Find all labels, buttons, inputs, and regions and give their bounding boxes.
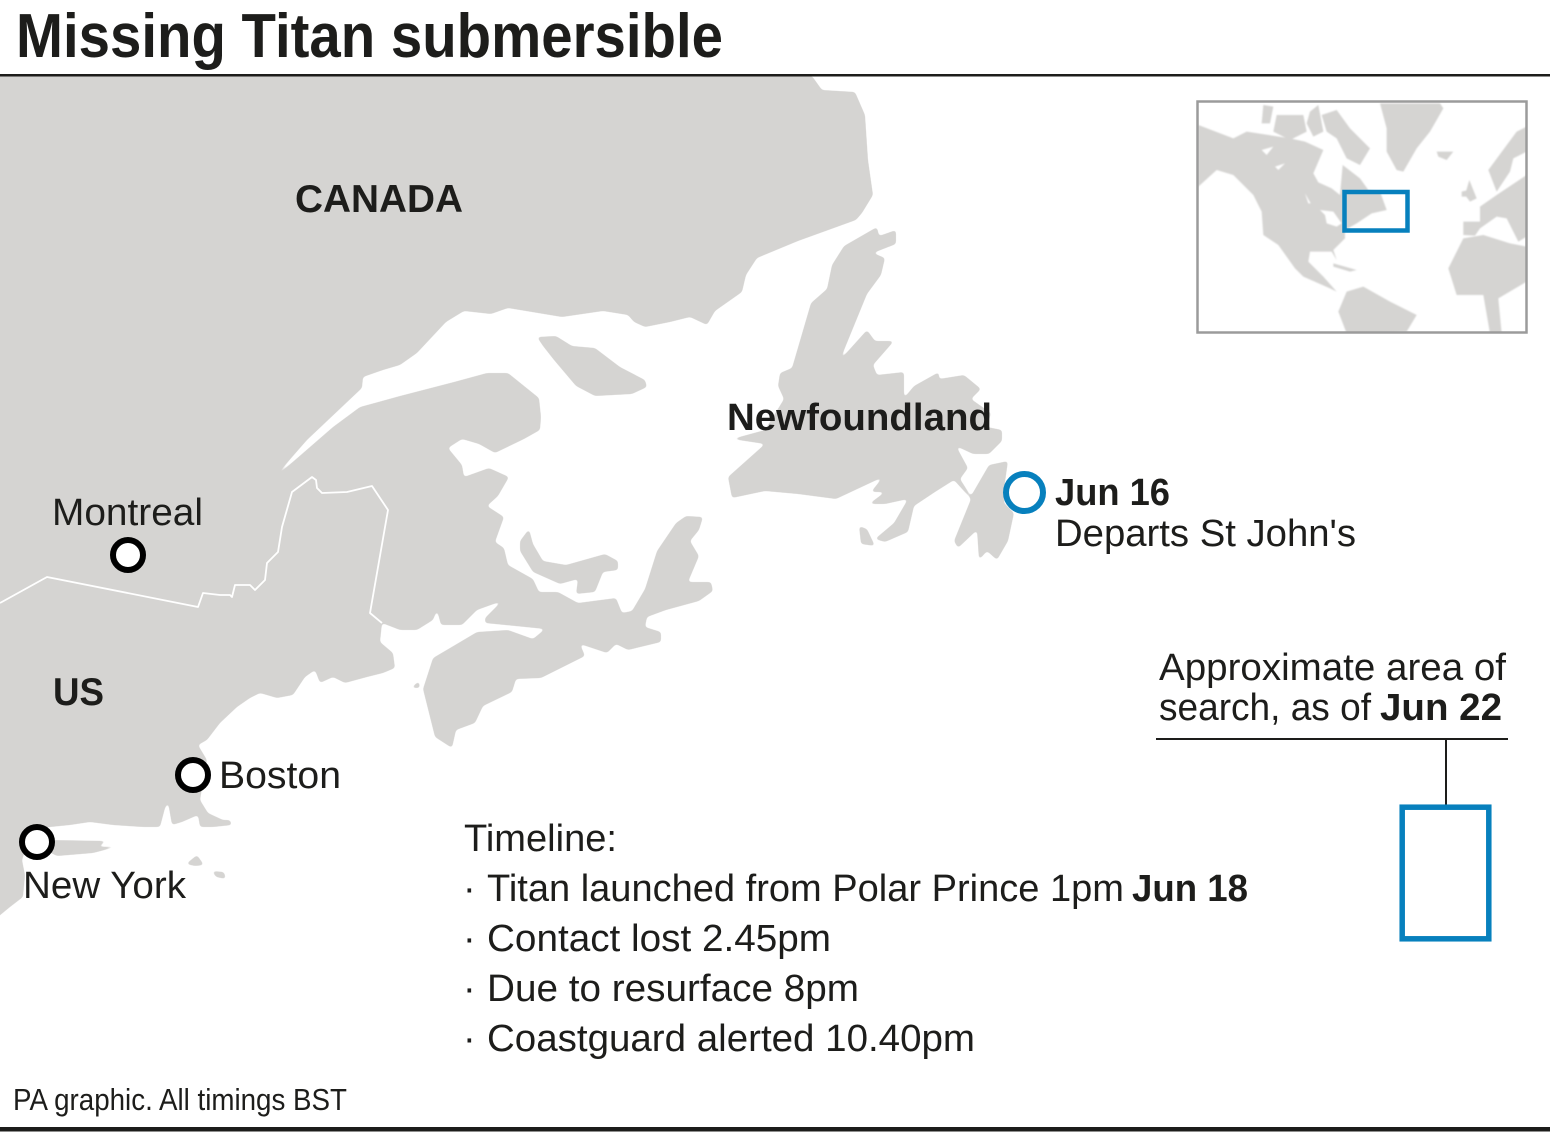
callout text — [1159, 647, 1506, 729]
timeline text block: · — [463, 968, 476, 1010]
label: CANADA: CANADA — [295, 178, 463, 221]
marker: Boston — [178, 760, 208, 790]
inset locator map — [1198, 102, 1527, 333]
label: Jun 16 departure: Jun 16 — [1055, 472, 1170, 514]
timeline text block: Contact lost 2.45pm — [487, 918, 831, 960]
timeline text block: Jun 18 — [1132, 868, 1248, 910]
label: US: US — [53, 671, 104, 714]
callout leader lines — [1156, 739, 1508, 805]
search area rectangle — [1402, 807, 1489, 939]
border: Canada and US — [0, 477, 388, 623]
label: Boston: Boston — [219, 755, 341, 797]
land masses — [0, 76, 1014, 940]
timeline text block: Titan launched from Polar Prince 1pm — [487, 868, 1124, 910]
land: small islands — [186, 526, 875, 879]
inset land masses — [1198, 103, 1527, 333]
source note: PA graphic. All timings BST — [13, 1082, 347, 1117]
timeline text block: · — [463, 918, 476, 960]
label: Jun 16 departure — [1055, 472, 1356, 555]
inset frame — [1198, 102, 1526, 332]
label: New York: New York — [23, 865, 187, 907]
timeline text block: Timeline: — [464, 818, 617, 860]
marker: New York — [22, 827, 52, 857]
timeline text block: Coastguard alerted 10.40pm — [487, 1018, 975, 1060]
label: Newfoundland: Newfoundland — [727, 397, 992, 439]
title: Missing Titan submersible — [16, 2, 723, 71]
land: mainland Canada and US — [0, 76, 873, 940]
map: Atlantic Canada and north-east US — [0, 76, 1356, 940]
callout text: search, as of — [1159, 687, 1371, 729]
callout text: Approximate area of — [1159, 647, 1506, 689]
timeline text block — [463, 818, 1248, 1060]
timeline text block: · — [463, 1018, 476, 1060]
search area callout — [1156, 647, 1508, 939]
label: Montreal: Montreal — [52, 492, 203, 534]
land: Newfoundland — [728, 227, 1014, 560]
timeline text block: Due to resurface 8pm — [487, 968, 859, 1010]
timeline text block: · — [463, 868, 476, 910]
marker: St John's departure — [1006, 474, 1043, 511]
land: Long Island — [45, 840, 120, 856]
marker: Montreal — [113, 540, 143, 570]
callout text: Jun 22 — [1380, 687, 1502, 729]
land: Prince Edward Island — [520, 529, 618, 594]
land: Anticosti Island — [537, 336, 647, 396]
inset highlight box — [1344, 192, 1408, 230]
label: Jun 16 departure: Departs St John's — [1055, 513, 1356, 555]
